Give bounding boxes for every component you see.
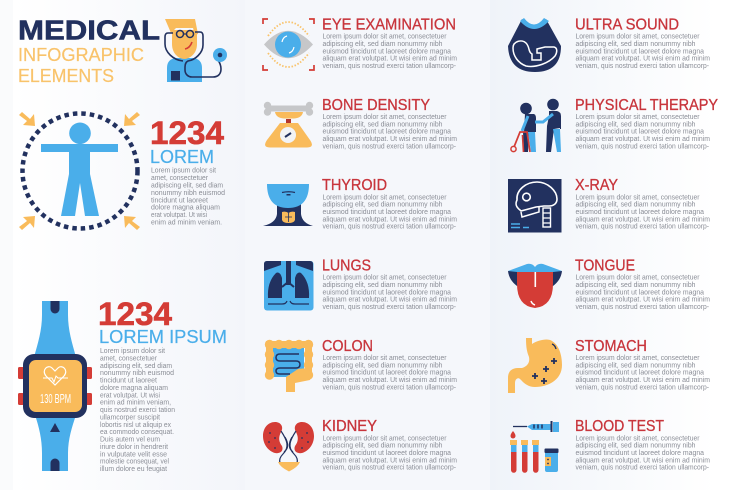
stat: 1234 lorem ipsum: ullamcorper suscipit	[100, 414, 160, 421]
icon: ultrasound scan	[508, 18, 561, 72]
text block: adipiscing elit, sed diam nonummy nibh	[322, 202, 443, 209]
icon: bone on scale	[264, 102, 313, 148]
text block: veniam, quis nostrud exerci tation ullamcorp-	[322, 384, 456, 391]
stat: 1234 lorem ipsum: amet, consectetuer	[100, 355, 158, 362]
text block: aliquam erat volutpat. Ut wisi enim ad minim	[576, 136, 710, 143]
stat: 1234 lorem ipsum: quis nostrud exerci tation	[100, 407, 175, 414]
heading: PHYSICAL THERAPY	[575, 97, 718, 114]
panel: tongue	[508, 258, 710, 311]
text block	[576, 194, 710, 231]
stat: 1234 lorem: enim ad minim veniam.	[151, 220, 222, 226]
text block	[322, 355, 457, 391]
stat: 1234 lorem	[150, 115, 225, 226]
stat: 1234 lorem ipsum: LOREM IPSUM	[99, 327, 227, 347]
stat: 1234 lorem: adipiscing elit, sed diam	[151, 182, 223, 190]
text block: adipiscing elit, sed diam nonummy nibh	[322, 443, 443, 450]
text block: adipiscing elit, sed diam nonummy nibh	[576, 41, 696, 48]
stat: 1234 lorem: tincidunt ut laoreet	[151, 197, 208, 204]
stat: 1234 lorem ipsum: dolore magna aliquam	[100, 385, 168, 392]
panel: lungs	[264, 258, 457, 311]
panel: bone density	[264, 97, 457, 150]
text block: aliquam erat volutpat. Ut wisi enim ad minim	[576, 56, 710, 63]
panel: blood test	[510, 418, 710, 473]
title: INFOGRAPHIC	[18, 44, 144, 65]
icon: neck with thyroid	[263, 184, 313, 226]
text block	[322, 34, 457, 70]
panel: kidney	[263, 418, 457, 472]
text block: Lorem ipsum dolor sit amet, consectetuer	[322, 194, 447, 201]
text block: Lorem ipsum dolor sit amet, consectetuer	[322, 114, 447, 121]
text block: aliquam erat volutpat. Ut wisi enim ad minim	[322, 297, 457, 304]
heading: STOMACH	[575, 338, 647, 355]
icon: stomach	[508, 338, 562, 393]
text block: aliquam erat volutpat. Ut wisi enim ad minim	[576, 377, 710, 384]
stat: 1234 lorem ipsum: iriure dolor in hendrerit	[100, 444, 168, 451]
text block: adipiscing elit, sed diam nonummy nibh	[576, 443, 696, 450]
heading: X-RAY	[575, 177, 618, 194]
text block: euismod tincidunt ut laoreet dolore magna	[322, 48, 451, 55]
heading: TONGUE	[575, 258, 635, 274]
text block: adipiscing elit, sed diam nonummy nibh	[322, 41, 443, 48]
text block: veniam, quis nostrud exerci tation ullamcorp-	[576, 304, 709, 311]
text block: euismod tincidunt ut laoreet dolore magna	[576, 209, 704, 216]
panel: x-ray	[508, 177, 710, 232]
text block	[322, 275, 457, 311]
text block: adipiscing elit, sed diam nonummy nibh	[322, 282, 443, 289]
stat: 1234 lorem: Lorem ipsum dolor sit	[151, 168, 216, 175]
heading: KIDNEY	[322, 418, 377, 435]
panel: eye examination	[263, 16, 457, 70]
text block: veniam, quis nostrud exerci tation ullamcorp-	[576, 143, 709, 150]
panel: physical therapy	[511, 97, 718, 152]
title: ELEMENTS	[18, 65, 114, 86]
text block: veniam, quis nostrud exerci tation ullamcorp-	[322, 465, 456, 472]
text block: euismod tincidunt ut laoreet dolore magna	[322, 370, 451, 377]
text block: Lorem ipsum dolor sit amet, consectetuer	[322, 275, 447, 282]
text block: veniam, quis nostrud exerci tation ullamcorp-	[576, 63, 709, 70]
text block: Lorem ipsum dolor sit amet, consectetuer	[576, 114, 700, 121]
icon: tongue	[508, 264, 562, 308]
text block: adipiscing elit, sed diam nonummy nibh	[322, 362, 443, 369]
stat: 1234 lorem ipsum: enim ad minim veniam,	[100, 400, 171, 407]
text block: veniam, quis nostrud exerci tation ullamcorp-	[576, 465, 709, 472]
text block	[576, 34, 710, 70]
text block: Lorem ipsum dolor sit amet, consectetuer	[576, 355, 700, 362]
text block: Lorem ipsum dolor sit amet, consectetuer	[576, 275, 700, 282]
text block: veniam, quis nostrud exerci tation ullamcorp-	[322, 143, 456, 150]
text block: euismod tincidunt ut laoreet dolore magna	[322, 129, 451, 136]
text block	[576, 355, 710, 391]
text block: Lorem ipsum dolor sit amet, consectetuer	[576, 34, 700, 41]
heading: ULTRA SOUND	[575, 16, 679, 34]
stat: 1234 lorem: LOREM	[150, 147, 214, 167]
text block: euismod tincidunt ut laoreet dolore magna	[576, 289, 704, 296]
text block: Lorem ipsum dolor sit amet, consectetuer	[322, 34, 447, 41]
text block	[322, 114, 457, 150]
icon: syringe, test tubes and sample jar	[510, 421, 559, 473]
text block: euismod tincidunt ut laoreet dolore magna	[576, 370, 704, 377]
panel: colon	[265, 338, 457, 392]
title	[18, 14, 160, 86]
text block: veniam, quis nostrud exerci tation ullamcorp-	[322, 224, 456, 231]
text block	[576, 435, 710, 472]
stat: 1234 lorem: amet, consectetuer	[151, 175, 209, 182]
icon: skull x-ray	[508, 179, 562, 232]
stat: 1234 lorem ipsum	[98, 296, 227, 473]
stat: 1234 lorem: 1234	[150, 115, 224, 151]
text block: veniam, quis nostrud exerci tation ullamcorp-	[576, 224, 709, 231]
text block: aliquam erat volutpat. Ut wisi enim ad minim	[322, 457, 457, 464]
text block: aliquam erat volutpat. Ut wisi enim ad minim	[322, 56, 457, 63]
text block	[322, 194, 457, 231]
stat: 1234 lorem ipsum: nonummy nibh euismod	[100, 370, 174, 377]
stat: 1234 lorem ipsum: 1234	[98, 296, 172, 332]
icon: doctor with stethoscope	[165, 19, 227, 82]
stat: 1234 lorem ipsum: lobortis nisl ut aliquip ex	[100, 422, 172, 429]
heading: EYE EXAMINATION	[322, 16, 456, 34]
stat: 1234 lorem ipsum: illum dolore eu feugiat	[100, 466, 167, 473]
heading: BONE DENSITY	[322, 97, 430, 114]
icon: kidneys and bladder	[263, 422, 314, 472]
icon: smart watch	[18, 301, 92, 471]
text block: euismod tincidunt ut laoreet dolore magna	[322, 450, 451, 457]
stat: 1234 lorem ipsum: Duis autem vel eum	[100, 436, 160, 444]
stat: 1234 lorem ipsum: erat volutpat. Ut wisi	[100, 392, 160, 399]
panel: thyroid	[263, 177, 457, 231]
text block: Lorem ipsum dolor sit amet, consectetuer	[322, 355, 447, 362]
icon: lungs x-ray	[264, 261, 314, 310]
icon: therapist helping patient with walker	[511, 99, 561, 152]
icon: colon	[265, 340, 313, 392]
text block: aliquam erat volutpat. Ut wisi enim ad minim	[322, 136, 457, 143]
text block: Lorem ipsum dolor sit amet, consectetuer	[576, 194, 700, 201]
text block: adipiscing elit, sed diam nonummy nibh	[576, 282, 696, 289]
title: MEDICAL	[18, 14, 160, 46]
heading: LUNGS	[322, 258, 371, 274]
heading: BLOOD TEST	[575, 418, 664, 435]
text block: aliquam erat volutpat. Ut wisi enim ad minim	[322, 377, 457, 384]
text block	[576, 114, 710, 150]
stat: 1234 lorem ipsum: tincidunt ut laoreet	[100, 378, 157, 384]
text block	[322, 435, 457, 472]
icon: eye	[263, 19, 314, 70]
stat: 1234 lorem ipsum: in vulputate velit esse	[100, 451, 167, 458]
text block: aliquam erat volutpat. Ut wisi enim ad minim	[576, 457, 710, 464]
text block: aliquam erat volutpat. Ut wisi enim ad minim	[322, 216, 457, 223]
text block: veniam, quis nostrud exerci tation ullamcorp-	[322, 304, 456, 311]
text block: Lorem ipsum dolor sit amet, consectetuer	[322, 435, 447, 442]
panel: stomach	[508, 338, 710, 393]
stat: 1234 lorem ipsum: ea commodo consequat.	[100, 429, 174, 436]
text block: adipiscing elit, sed diam nonummy nibh	[576, 362, 696, 369]
text block: euismod tincidunt ut laoreet dolore magna	[576, 48, 704, 55]
text block: aliquam erat volutpat. Ut wisi enim ad minim	[576, 297, 710, 304]
text block: veniam, quis nostrud exerci tation ullamcorp-	[322, 63, 456, 70]
text block: adipiscing elit, sed diam nonummy nibh	[576, 121, 696, 128]
stat: 1234 lorem ipsum: adipiscing elit, sed diam	[100, 363, 172, 370]
stat: 1234 lorem ipsum: Lorem ipsum dolor sit	[100, 348, 165, 355]
icon: body measurement figure	[19, 112, 140, 230]
stat: 1234 lorem: erat volutpat. Ut wisi	[151, 212, 207, 219]
panel: ultra sound	[508, 16, 710, 72]
text block: euismod tincidunt ut laoreet dolore magna	[576, 129, 704, 136]
text block: veniam, quis nostrud exerci tation ullamcorp-	[576, 384, 709, 391]
text block: euismod tincidunt ut laoreet dolore magna	[322, 289, 451, 296]
text block: aliquam erat volutpat. Ut wisi enim ad minim	[576, 216, 710, 223]
text block: euismod tincidunt ut laoreet dolore magna	[322, 209, 451, 216]
text block: Lorem ipsum dolor sit amet, consectetuer	[576, 435, 700, 442]
heading: THYROID	[322, 177, 387, 194]
stat: 1234 lorem ipsum: molestie consequat, vel	[100, 459, 169, 466]
icon: smart watch: 130 BPM	[40, 392, 71, 406]
stat: 1234 lorem: dolore magna aliquam	[151, 205, 220, 212]
text block: adipiscing elit, sed diam nonummy nibh	[576, 202, 696, 209]
heading: COLON	[322, 338, 373, 355]
text block	[576, 275, 710, 311]
stat: 1234 lorem: nonummy nibh euismod	[151, 190, 225, 197]
text block: adipiscing elit, sed diam nonummy nibh	[322, 121, 443, 128]
text block: euismod tincidunt ut laoreet dolore magna	[576, 450, 704, 457]
